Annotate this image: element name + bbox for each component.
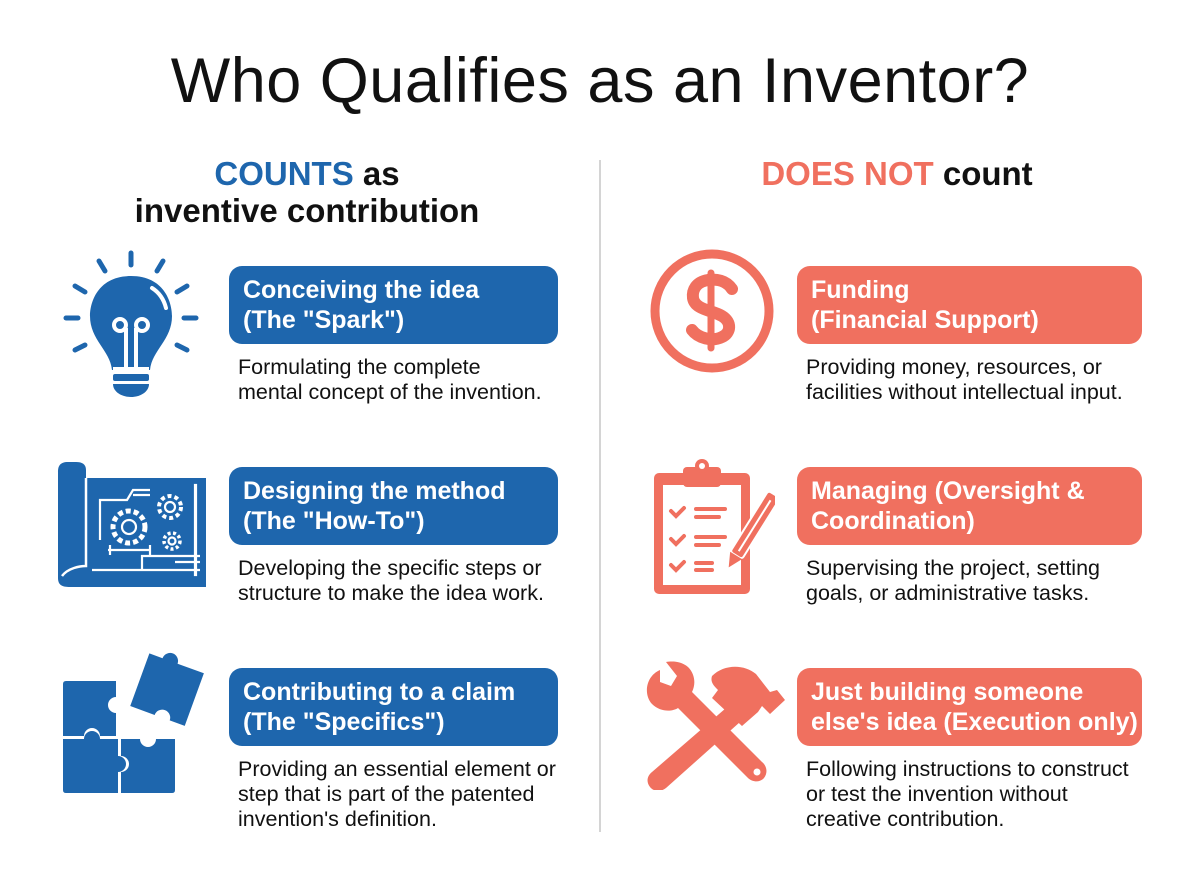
box: managing — [797, 467, 1142, 545]
box: building: else's idea (Execution only) — [811, 708, 1138, 736]
heading: does not count: DOES NOT count — [761, 155, 1033, 192]
box: funding: Funding — [811, 276, 910, 304]
desc: funding — [806, 355, 1123, 404]
icon: light bulb — [64, 250, 198, 397]
desc: claim: Providing an essential element or — [238, 757, 556, 781]
desc: building: or test the invention without — [806, 782, 1068, 806]
icon: puzzle — [63, 652, 204, 793]
box: claim: Contributing to a claim — [243, 678, 515, 706]
desc: building: creative contribution. — [806, 807, 1004, 831]
box: managing: Managing (Oversight & — [811, 477, 1085, 505]
desc: claim — [238, 757, 556, 831]
desc: conceiving — [238, 355, 542, 404]
icon: dollar — [650, 250, 774, 372]
box: conceiving: (The "Spark") — [243, 306, 404, 334]
box: conceiving — [229, 266, 558, 344]
desc: managing: goals, or administrative tasks. — [806, 581, 1089, 605]
desc: managing: Supervising the project, setting — [806, 556, 1100, 580]
icon: blueprint — [58, 462, 206, 587]
icon: clipboard — [654, 459, 775, 594]
desc: designing: Developing the specific steps or — [238, 556, 542, 580]
desc: funding: facilities without intellectual input. — [806, 380, 1123, 404]
title: Who Qualifies as an Inventor? — [171, 46, 1029, 116]
desc: building — [806, 757, 1129, 831]
desc: conceiving: Formulating the complete — [238, 355, 481, 379]
desc: conceiving: mental concept of the invention. — [238, 380, 542, 404]
box: conceiving: Conceiving the idea — [243, 276, 479, 304]
desc: designing — [238, 556, 544, 605]
box: claim — [229, 668, 558, 746]
box: funding: (Financial Support) — [811, 306, 1039, 334]
desc: building: Following instructions to construct — [806, 757, 1129, 781]
box: designing: Designing the method — [243, 477, 506, 505]
heading: counts — [135, 155, 479, 229]
box: building: Just building someone — [811, 678, 1083, 706]
box: managing: Coordination) — [811, 507, 975, 535]
box: designing: (The "How-To") — [243, 507, 425, 535]
desc: designing: structure to make the idea work. — [238, 581, 544, 605]
box: building — [797, 668, 1142, 746]
desc: claim: step that is part of the patented — [238, 782, 534, 806]
box: claim: (The "Specifics") — [243, 708, 445, 736]
icon: tools — [646, 662, 785, 790]
desc: funding: Providing money, resources, or — [806, 355, 1102, 379]
desc: claim: invention's definition. — [238, 807, 437, 831]
divider — [599, 160, 601, 832]
box: funding — [797, 266, 1142, 344]
box: designing — [229, 467, 558, 545]
heading: counts: COUNTS as — [214, 155, 400, 192]
heading: counts: inventive contribution — [135, 192, 479, 229]
desc: managing — [806, 556, 1100, 605]
